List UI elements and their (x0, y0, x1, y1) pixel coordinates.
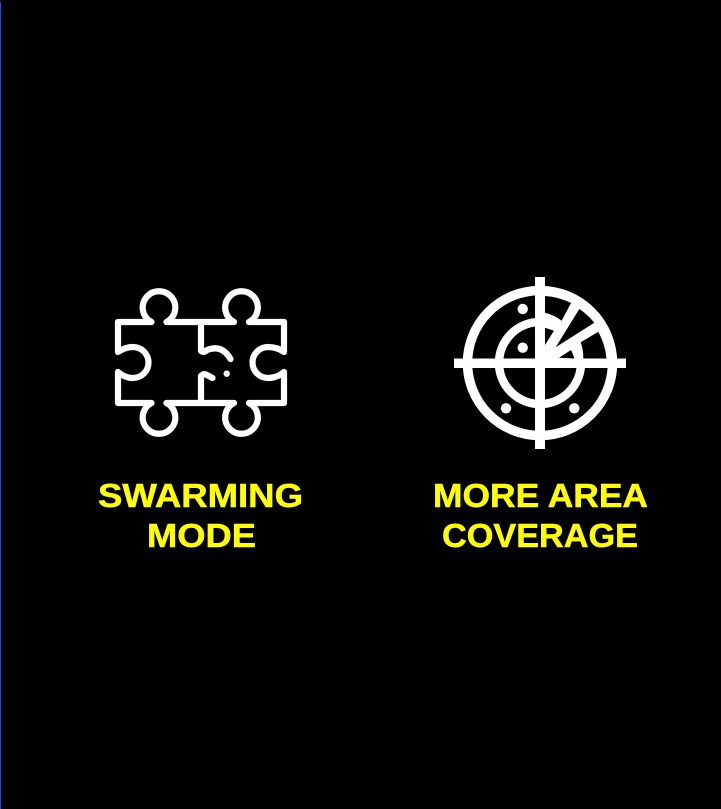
heading: more area coverage: MORE AREA (433, 477, 648, 514)
heading: swarming mode: SWARMING (98, 477, 303, 514)
heading: more area coverage: COVERAGE (442, 517, 638, 554)
heading: swarming mode (98, 477, 303, 554)
icon: puzzle pieces (118, 291, 284, 434)
icon: radar (454, 277, 626, 449)
heading: swarming mode: MODE (147, 517, 256, 554)
heading: more area coverage (433, 477, 648, 554)
